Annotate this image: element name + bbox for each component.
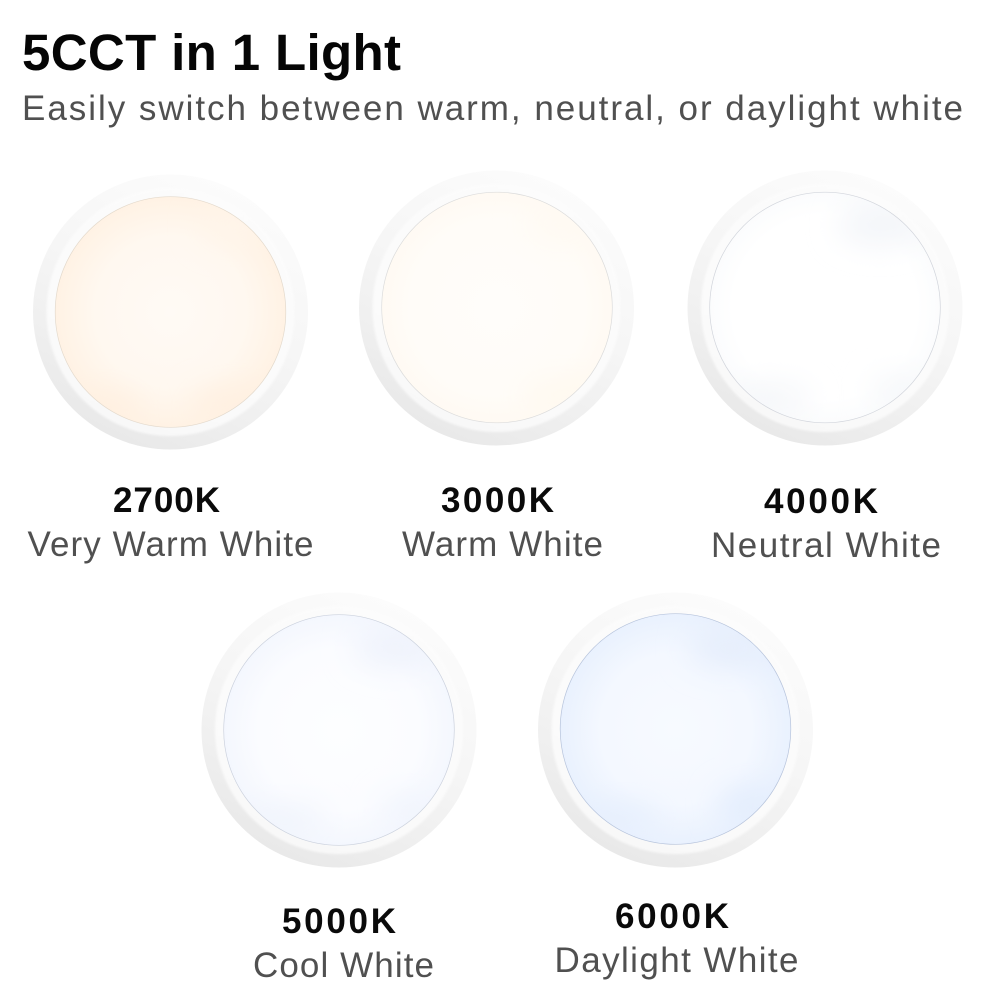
label: 4000K neutral white: 4000K bbox=[764, 482, 878, 521]
label: 4000K neutral white: Neutral White bbox=[711, 526, 941, 565]
label: 2700K very warm white: Very Warm White bbox=[28, 525, 314, 564]
light: 4000K neutral white bbox=[688, 170, 962, 446]
label: 6000K daylight white: 6000K bbox=[615, 897, 729, 936]
label: 5000K cool white: 5000K bbox=[282, 902, 396, 941]
label: 3000K warm white: Warm White bbox=[402, 525, 603, 564]
subtitle: Easily switch between warm, neutral, or daylight white bbox=[22, 89, 963, 128]
light: 3000K warm white bbox=[359, 170, 634, 446]
label: 3000K warm white bbox=[402, 481, 603, 564]
label: 2700K very warm white bbox=[28, 481, 314, 564]
light: 2700K very warm white bbox=[33, 174, 308, 450]
light: 5000K cool white bbox=[202, 592, 476, 868]
label: 5000K cool white bbox=[253, 902, 434, 985]
light: 6000K daylight white bbox=[538, 592, 813, 868]
label: 4000K neutral white bbox=[711, 482, 941, 565]
label: 2700K very warm white: 2700K bbox=[113, 481, 220, 520]
label: 6000K daylight white: Daylight White bbox=[554, 941, 798, 980]
label: 3000K warm white: 3000K bbox=[441, 481, 554, 520]
title: 5CCT in 1 Light bbox=[22, 24, 401, 81]
label: 5000K cool white: Cool White bbox=[253, 946, 434, 985]
label: 6000K daylight white bbox=[554, 897, 798, 980]
